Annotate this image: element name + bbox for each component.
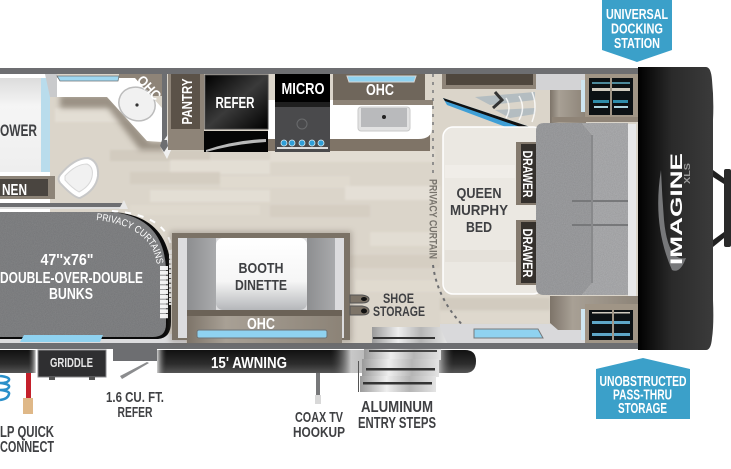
pass-thru compartment: top (589, 78, 633, 115)
front cap (638, 67, 713, 350)
privacy curtain dashed line (426, 74, 474, 336)
label: booth dinette: DINETTE (235, 277, 287, 294)
griddle (38, 350, 106, 380)
label: privacy curtain: PRIVACY CURTAIN (426, 179, 438, 259)
LP hose (0, 373, 33, 414)
callout: unobstructed pass-thru storage (596, 358, 690, 419)
awning (157, 350, 476, 373)
wall-mounted TV (443, 92, 535, 136)
label: LP quick connect: LP QUICK (0, 424, 54, 441)
logo swoosh (658, 170, 686, 271)
label: queen murphy bed (450, 185, 508, 236)
walls (0, 68, 640, 349)
1.6 cu ft refer door (113, 349, 157, 379)
label: aluminum entry steps: ALUMINUM (361, 399, 433, 416)
toilet (58, 158, 98, 198)
label: micro: MICRO (282, 81, 324, 98)
label: drawer: DRAWER (520, 150, 536, 198)
logo: imagine xls: XLS (683, 162, 692, 184)
label: shoe storage: STORAGE (373, 303, 425, 319)
pass-thru compartment: bottom (589, 310, 633, 340)
microwave (275, 74, 330, 102)
label: booth dinette: BOOTH (238, 260, 284, 277)
double-over-double bunks (0, 200, 186, 343)
label: shoe storage: SHOE (383, 290, 414, 306)
hitch (713, 169, 731, 247)
refer door (204, 131, 268, 152)
linen cabinet (0, 176, 55, 199)
label: refer: REFER (216, 95, 255, 112)
skylight (347, 76, 416, 82)
label: griddle: GRIDDLE (50, 355, 93, 370)
label: 1.6 cu ft refer: 1.6 CU. FT. (106, 389, 164, 406)
label: OHC: OHC (134, 72, 165, 103)
overhead cabinet: bedroom (442, 74, 536, 89)
drawer: lower (516, 220, 536, 285)
shoe storage (350, 290, 425, 319)
label: linen: NEN (2, 182, 27, 199)
top right storage (536, 74, 638, 123)
refrigerator (204, 75, 268, 152)
logo: imagine xls (667, 153, 692, 265)
label: OHC: OHC (247, 316, 275, 333)
label: pantry: PANTRY (179, 78, 196, 124)
label: bunks: 47''x76" (40, 252, 94, 269)
aluminum entry steps (358, 327, 447, 392)
label: aluminum entry steps: ENTRY STEPS (358, 415, 436, 432)
privacy curtains track (112, 211, 172, 252)
callout: unobstructed pass-thru storage: UNOBSTRUCTED (600, 374, 686, 390)
stove (275, 102, 330, 152)
bathroom vanity (45, 72, 165, 150)
label: bunks: BUNKS (49, 286, 93, 303)
label: 1.6 cu ft refer (106, 389, 164, 421)
overhead cabinet: dinette (187, 310, 342, 343)
label: aluminum entry steps (358, 399, 436, 432)
label: awning: 15' AWNING (211, 355, 287, 372)
bottom right storage (440, 296, 640, 343)
curtain: inner (160, 266, 168, 319)
skylight (57, 76, 119, 81)
label: privacy curtains: PRIVACY CURTAINS (96, 213, 164, 264)
label: coax tv hookup (293, 409, 345, 441)
sofa (536, 123, 636, 296)
icon: shoes (350, 295, 369, 315)
label: shower: OWER (0, 121, 37, 140)
queen murphy bed (443, 127, 543, 294)
drawer: upper (516, 142, 536, 205)
label: OHC: OHC (366, 82, 394, 99)
label: LP quick connect (0, 424, 54, 456)
callout: universal docking station: DOCKING (611, 22, 663, 38)
floor: wood planks (50, 74, 640, 344)
kitchen counter with sink (268, 100, 432, 151)
entry door window (474, 329, 543, 338)
pantry cabinet (168, 74, 204, 150)
callout: universal docking station: UNIVERSAL (606, 7, 668, 23)
label: queen murphy bed: BED (466, 219, 492, 236)
label: 1.6 cu ft refer: REFER (118, 404, 153, 421)
curtain: outer (169, 250, 177, 305)
logo: imagine xls: IMAGINE (667, 153, 686, 265)
bathroom partition wall (160, 74, 172, 159)
label: shoe storage (373, 290, 425, 319)
label: queen murphy bed: MURPHY (450, 202, 508, 219)
label: drawer: DRAWER (520, 228, 536, 278)
label: queen murphy bed: QUEEN (456, 185, 502, 202)
label: bunks (0, 252, 143, 303)
label: bunks: DOUBLE-OVER-DOUBLE (0, 270, 143, 287)
label: booth dinette (235, 260, 287, 294)
callout: unobstructed pass-thru storage: PASS-THRU (613, 388, 672, 404)
label: coax tv hookup: HOOKUP (293, 424, 345, 441)
coax cable (315, 373, 321, 404)
callout: universal docking station: STATION (614, 36, 660, 52)
shower (0, 74, 50, 176)
label: coax tv hookup: COAX TV (295, 409, 343, 426)
overhead cabinet: kitchen (333, 74, 433, 105)
left exterior bar (0, 350, 36, 373)
booth dinette (170, 231, 352, 343)
callout: unobstructed pass-thru storage: STORAGE (618, 401, 667, 417)
bunk window (20, 335, 103, 342)
callout: universal docking station (602, 0, 672, 62)
label: LP quick connect: CONNECT (0, 439, 54, 456)
